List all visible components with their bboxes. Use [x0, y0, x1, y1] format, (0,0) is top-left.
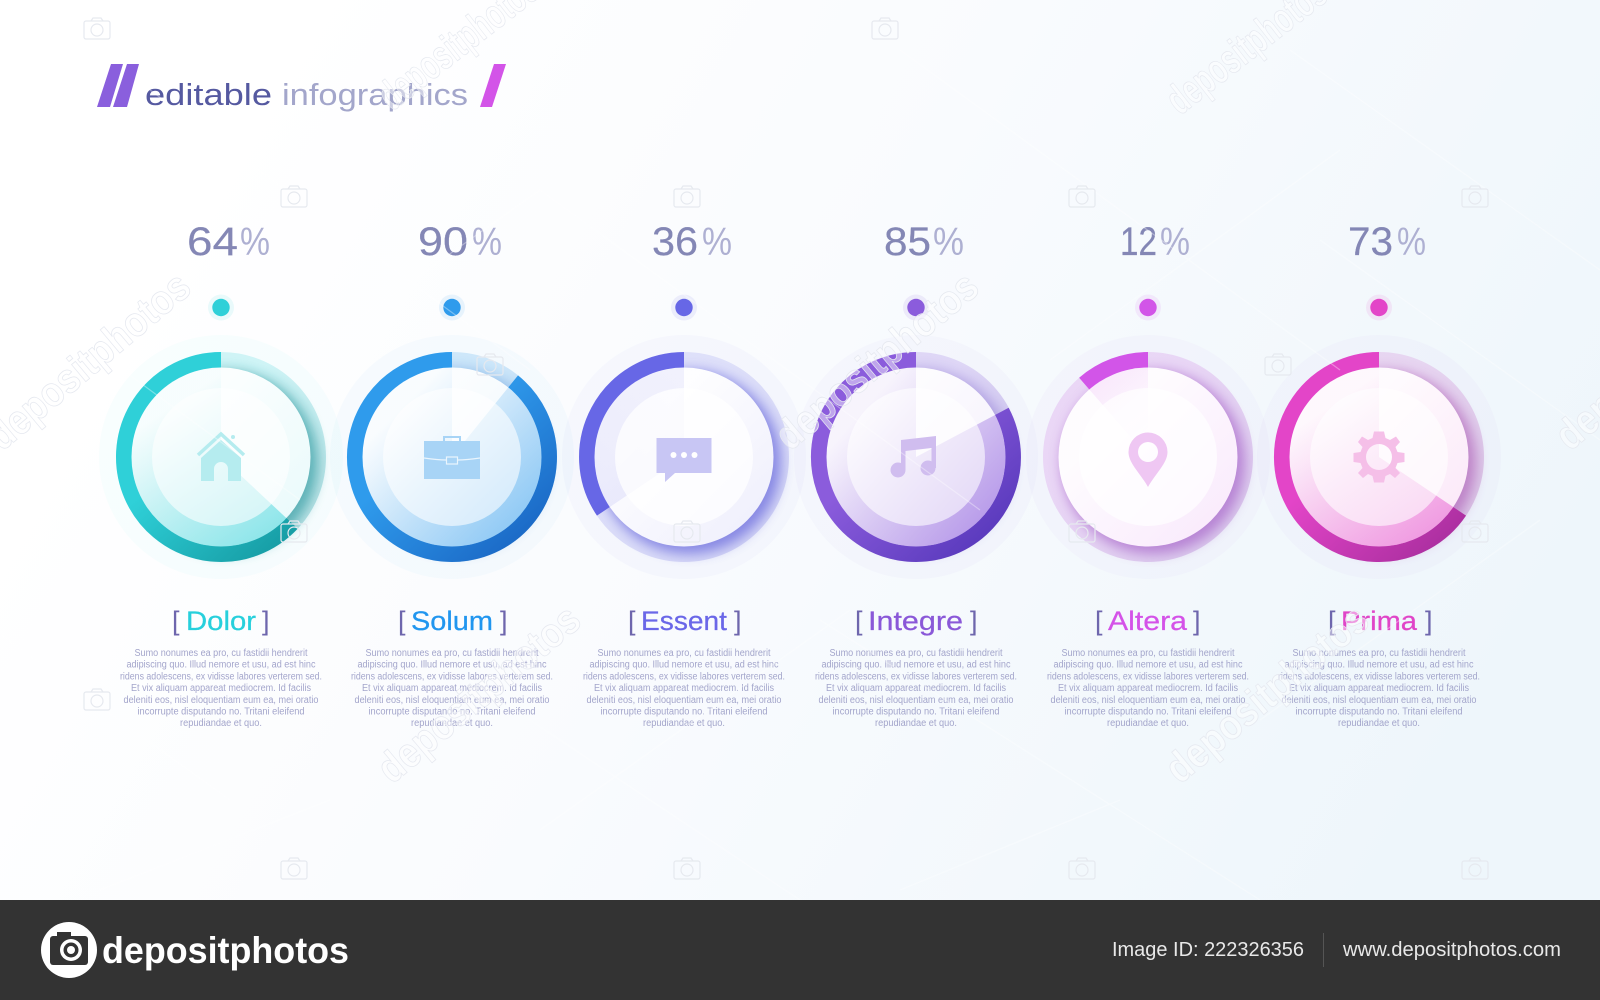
- icon: music note: [890, 436, 936, 478]
- title: [97, 64, 506, 112]
- panel: Dolor 64%: [99, 220, 343, 729]
- label: Dolor: [186, 606, 256, 636]
- description: repudiandae et quo.: [1107, 718, 1189, 729]
- description: repudiandae et quo.: [643, 718, 725, 729]
- description: [1278, 648, 1480, 729]
- marker dot: [1366, 294, 1392, 320]
- footer band: [0, 900, 1600, 1000]
- percent value: %: [1160, 221, 1190, 264]
- icon: map pin: [1128, 432, 1168, 487]
- description: incorrupte disputando no. Tritani eleifend: [368, 706, 536, 718]
- label: ]: [262, 606, 270, 636]
- description: deleniti eos, nisl eloquentiam eum ea, mei oratio: [1050, 695, 1246, 706]
- description: adipiscing quo. Illud nemore et usu, ad est hinc: [358, 660, 546, 671]
- description: Sumo nonumes ea pro, cu fastidii hendrerit: [598, 648, 771, 659]
- description: adipiscing quo. Illud nemore et usu, ad est hinc: [1284, 660, 1474, 671]
- description: Sumo nonumes ea pro, cu fastidii hendrerit: [830, 648, 1003, 659]
- description: adipiscing quo. Illud nemore et usu, ad est hinc: [590, 660, 778, 671]
- percent value: 64: [187, 220, 238, 264]
- description: [120, 648, 322, 729]
- panel: Prima 73%: [1257, 220, 1501, 729]
- description: Sumo nonumes ea pro, cu fastidii hendrerit: [1292, 648, 1466, 659]
- marker dot: [903, 294, 929, 320]
- panel: Altera 12%: [1026, 220, 1270, 729]
- description: repudiandae et quo.: [1338, 718, 1420, 729]
- description: Et vix aliquam appareat mediocrem. Id facilis: [131, 683, 311, 694]
- description: [351, 648, 553, 729]
- description: [815, 648, 1017, 729]
- description: deleniti eos, nisl eloquentiam eum ea, mei oratio: [586, 695, 782, 706]
- label: [: [628, 606, 636, 636]
- description: ridens adolescens, ex vidisse labores verterem sed.: [1278, 671, 1480, 682]
- icon: gear: [1354, 432, 1404, 482]
- donut chart: [1026, 335, 1270, 579]
- heading text: editable: [145, 77, 272, 112]
- percent value: 12: [1120, 220, 1157, 264]
- marker dot: [1135, 294, 1161, 320]
- description: Sumo nonumes ea pro, cu fastidii hendrerit: [366, 648, 539, 659]
- description: incorrupte disputando no. Tritani eleifend: [1296, 706, 1462, 718]
- description: deleniti eos, nisl eloquentiam eum ea, mei oratio: [124, 695, 319, 706]
- label: ]: [734, 606, 742, 636]
- label: ]: [500, 606, 508, 636]
- description: Sumo nonumes ea pro, cu fastidii hendrerit: [134, 648, 308, 659]
- logo text: depositphotos: [102, 930, 349, 971]
- label: ]: [970, 606, 978, 636]
- description: ridens adolescens, ex vidisse labores verterem sed.: [120, 671, 322, 682]
- description: incorrupte disputando no. Tritani eleifend: [138, 706, 304, 718]
- description: deleniti eos, nisl eloquentiam eum ea, mei oratio: [818, 695, 1014, 706]
- donut chart: [330, 335, 574, 579]
- percent value: %: [240, 221, 270, 264]
- description: repudiandae et quo.: [875, 718, 957, 729]
- percent value: 73: [1348, 220, 1393, 264]
- icon: chat bubble: [656, 438, 712, 482]
- description: deleniti eos, nisl eloquentiam eum ea, mei oratio: [354, 695, 550, 706]
- percent value: 85: [884, 220, 931, 264]
- watermark pattern: depositphotos: [1156, 595, 1377, 792]
- percent value: %: [472, 221, 502, 264]
- label: Integre: [868, 606, 963, 636]
- label: [: [1095, 606, 1103, 636]
- description: ridens adolescens, ex vidisse labores verterem sed.: [1047, 671, 1249, 682]
- watermark pattern: depositphotos: [368, 595, 589, 792]
- percent value: 90: [418, 220, 468, 264]
- description: Et vix aliquam appareat mediocrem. Id facilis: [594, 683, 774, 694]
- description: incorrupte disputando no. Tritani eleifend: [600, 706, 768, 718]
- description: incorrupte disputando no. Tritani eleifend: [1064, 706, 1232, 718]
- icon: house: [198, 434, 244, 481]
- donut chart: [1257, 335, 1501, 579]
- donut chart: [794, 335, 1038, 579]
- description: Et vix aliquam appareat mediocrem. Id facilis: [1058, 683, 1238, 694]
- percent value: %: [933, 221, 964, 264]
- icon: logo camera: [41, 922, 97, 978]
- label: ]: [1193, 606, 1201, 636]
- description: repudiandae et quo.: [411, 718, 493, 729]
- label: Prima: [1341, 606, 1418, 636]
- icon: briefcase: [424, 437, 480, 479]
- description: [583, 648, 785, 729]
- description: ridens adolescens, ex vidisse labores verterem sed.: [351, 671, 553, 682]
- description: incorrupte disputando no. Tritani eleifend: [832, 706, 1000, 718]
- description: deleniti eos, nisl eloquentiam eum ea, mei oratio: [1282, 695, 1477, 706]
- description: Sumo nonumes ea pro, cu fastidii hendrerit: [1062, 648, 1235, 659]
- label: [: [1328, 606, 1336, 636]
- description: [1047, 648, 1249, 729]
- percent value: %: [702, 221, 732, 264]
- description: repudiandae et quo.: [180, 718, 262, 729]
- donut chart: [99, 335, 343, 579]
- description: adipiscing quo. Illud nemore et usu, ad est hinc: [822, 660, 1010, 671]
- icon: double slash: [97, 64, 139, 107]
- marker dot: [671, 294, 697, 320]
- panel: Solum 90%: [330, 220, 574, 729]
- panel: Essent 36%: [562, 220, 806, 729]
- percent value: 36: [652, 220, 698, 264]
- description: adipiscing quo. Illud nemore et usu, ad est hinc: [126, 660, 316, 671]
- image id: Image ID: 222326356: [1112, 939, 1304, 961]
- description: ridens adolescens, ex vidisse labores verterem sed.: [815, 671, 1017, 682]
- website: www.depositphotos.com: [1342, 939, 1561, 961]
- label: ]: [1425, 606, 1433, 636]
- label: [: [172, 606, 180, 636]
- divider: [1323, 933, 1324, 967]
- label: Solum: [411, 606, 493, 636]
- donut chart: [562, 335, 806, 579]
- percent value: %: [1397, 221, 1426, 264]
- description: adipiscing quo. Illud nemore et usu, ad est hinc: [1054, 660, 1242, 671]
- watermark pattern: depositphotos: [766, 262, 987, 459]
- description: Et vix aliquam appareat mediocrem. Id facilis: [826, 683, 1006, 694]
- panel: Integre 85%: [794, 220, 1038, 729]
- label: [: [855, 606, 863, 636]
- label: Essent: [641, 606, 728, 636]
- label: Altera: [1108, 606, 1188, 636]
- label: [: [398, 606, 406, 636]
- icon: single slash: [480, 64, 506, 107]
- description: Et vix aliquam appareat mediocrem. Id facilis: [362, 683, 542, 694]
- description: ridens adolescens, ex vidisse labores verterem sed.: [583, 671, 785, 682]
- heading text: infographics: [282, 77, 468, 112]
- marker dot: [439, 294, 465, 320]
- description: Et vix aliquam appareat mediocrem. Id facilis: [1289, 683, 1469, 694]
- marker dot: [208, 294, 234, 320]
